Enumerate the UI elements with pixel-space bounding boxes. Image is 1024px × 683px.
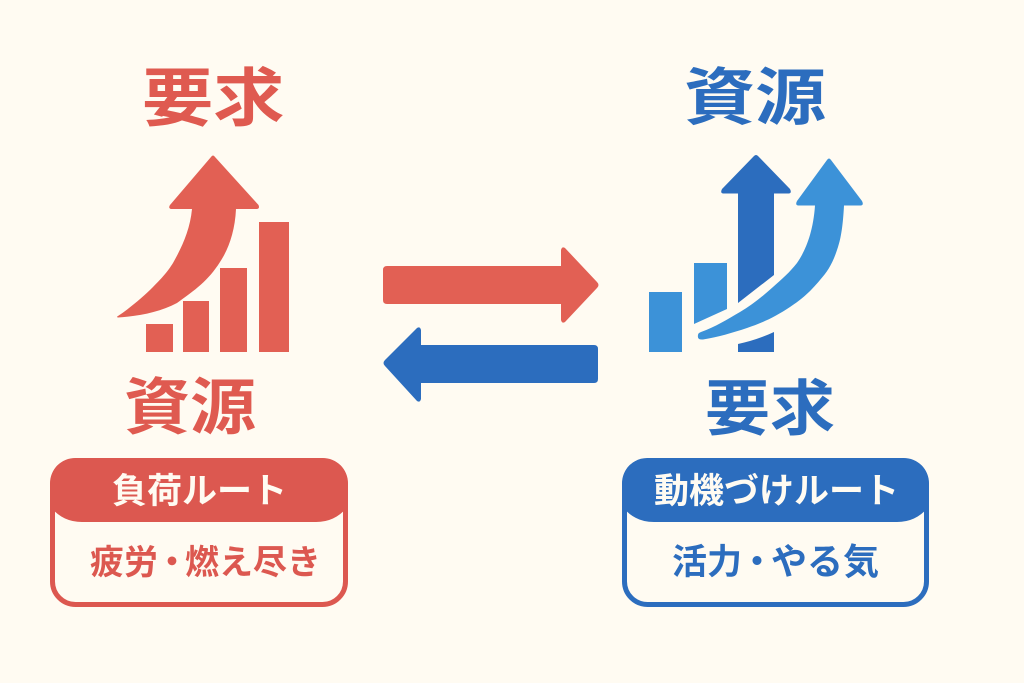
red bar 2 bbox=[183, 301, 209, 352]
panel header band bbox=[622, 458, 929, 522]
arrow: blue pointing left bbox=[384, 327, 598, 402]
panel: strain route bbox=[50, 458, 348, 604]
panel outcome text: 燃え尽き bbox=[185, 544, 321, 582]
heading: right demands: 要求 bbox=[705, 376, 835, 443]
icon: rising red arrow over bar chart bbox=[117, 156, 289, 352]
arrow: red pointing right bbox=[383, 247, 598, 323]
light blue bar 2 bbox=[694, 263, 727, 324]
light blue bar 1 bbox=[649, 292, 682, 352]
panel header label: 動機づけルート bbox=[654, 472, 899, 511]
light blue curved arrow bbox=[698, 158, 863, 340]
icon: rising blue arrows with bars bbox=[649, 155, 863, 352]
red bar 4 bbox=[259, 222, 289, 352]
dark blue straight arrow bbox=[721, 155, 791, 352]
heading: right resources: 資源 bbox=[684, 64, 826, 133]
red bar 1 bbox=[146, 324, 173, 352]
panel outcome text: ・ bbox=[155, 544, 189, 582]
panel outcome text: やる気 bbox=[771, 541, 879, 582]
panel body outline bbox=[624, 460, 926, 604]
panel outcome text: 疲労 bbox=[90, 544, 158, 582]
panel outcome text: 活力 bbox=[672, 543, 742, 582]
panel body outline bbox=[52, 460, 346, 604]
red curved arrow bbox=[117, 156, 259, 318]
panel header band bbox=[50, 458, 348, 522]
heading: left resources: 資源 bbox=[124, 373, 256, 442]
heading: left demands: 要求 bbox=[142, 64, 284, 135]
panel outcome text: ・ bbox=[740, 543, 775, 582]
panel: motivation route bbox=[622, 458, 929, 604]
red bar 3 bbox=[220, 268, 247, 352]
panel header label: 負荷ルート bbox=[112, 472, 287, 511]
